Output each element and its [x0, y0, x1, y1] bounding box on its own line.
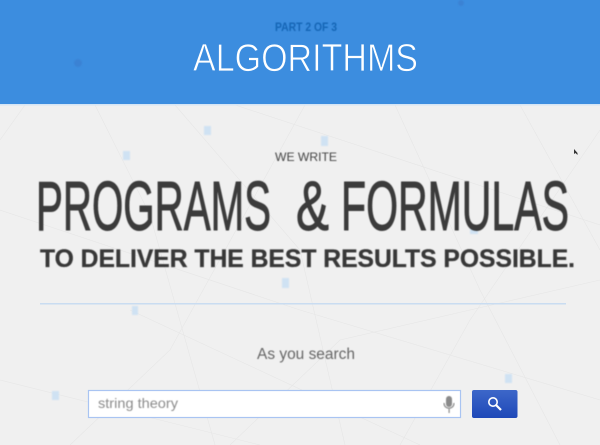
search prompt: As you search: [257, 346, 355, 363]
part label: PART 2 OF 3: [275, 20, 337, 34]
icon: microphone: [444, 396, 454, 413]
intro text: WE WRITE: [275, 150, 337, 164]
subheadline: TO DELIVER THE BEST RESULTS POSSIBLE.: [40, 245, 575, 273]
search button: [472, 390, 518, 418]
headline: &: [296, 167, 329, 245]
cursor: [574, 149, 578, 155]
icon: magnifier: [489, 398, 501, 410]
section title: ALGORITHMS: [193, 37, 418, 80]
query text: string theory: [98, 395, 178, 411]
header band: [0, 0, 600, 106]
headline: PROGRAMS: [36, 167, 271, 245]
divider: [40, 303, 566, 304]
network nodes: [52, 126, 512, 400]
search box: [88, 390, 460, 418]
